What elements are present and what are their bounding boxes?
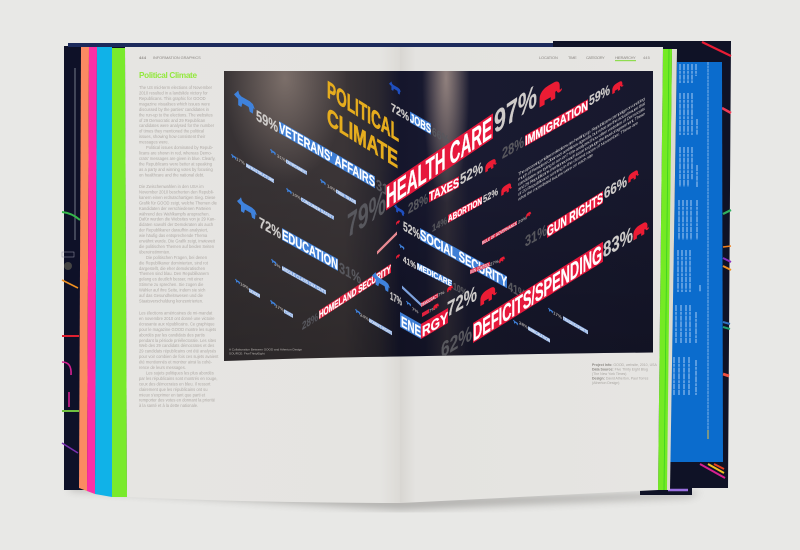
article body text: Political issues dominated by Repub- — [146, 145, 214, 150]
article body text: candidates were analysed for the number — [139, 123, 215, 128]
band: medicare: MEDICARE — [417, 261, 452, 289]
band: health care — [348, 86, 536, 236]
running header: right navigation — [539, 55, 650, 61]
icons: Democratic donkeys — [231, 80, 553, 326]
band: energy — [390, 286, 477, 339]
article body text: discussed by the parties' candidates in — [139, 107, 210, 112]
project credits — [592, 363, 657, 385]
article body text: en novembre 2010 ont donné une victoire — [139, 316, 215, 321]
article body text: Die politischen Fragen, bei denen — [146, 255, 208, 260]
Republican issues: small bands: 7% — [429, 305, 436, 315]
article body text: the run-up to the elections. The websites — [139, 112, 213, 117]
Democratic issues: small bands: 31% — [277, 153, 287, 164]
poster intro paragraph: and 29 Republicans mentioned each issue to gauge the level of agreement. These — [518, 111, 645, 193]
article body text: of 29 Democratic and 29 Republican — [139, 118, 206, 123]
icons: Republican elephants — [396, 78, 649, 310]
band: jobs: JOBS — [410, 110, 431, 136]
band: social security: SOCIAL SECURITY — [420, 227, 507, 291]
band: energy: 17% — [390, 289, 402, 309]
article body text: The US mid-term elections of November — [139, 85, 213, 90]
poster intro paragraph: what the most-listed issues were on each site — [518, 152, 593, 203]
band: education — [259, 214, 361, 288]
article body text: issues, showing how consistent their — [139, 134, 206, 139]
Democratic issues: small bands: ETHICS — [284, 309, 293, 320]
blue back page with vertical text — [670, 62, 723, 462]
Democratic issues: small bands: ENVIRONMENT — [286, 159, 307, 177]
band: abortion: 52% — [483, 186, 498, 206]
article body text: erwähnt wurde. Die Grafik zeigt, inwieweit — [139, 238, 216, 244]
article body text: the Republicans were better at speaking — [139, 161, 213, 166]
Democratic issues: large bands — [256, 100, 526, 303]
Democratic issues: small bands: GENDER — [249, 288, 260, 300]
band: immigration: 28% — [502, 133, 524, 163]
band: taxes — [408, 162, 483, 214]
band: immigration: 59% — [589, 82, 610, 110]
running header: left: INFORMATION GRAPHICS — [153, 55, 201, 60]
band: education: 72% — [259, 214, 281, 243]
poster title — [327, 80, 399, 168]
Republican issues: small bands: RULE OF GOVERNANCE — [482, 221, 517, 247]
article body text: der Republikaner daraufhin analysiert, — [139, 228, 208, 233]
article body text: Les sujets politiques les plus abordés — [146, 370, 214, 376]
article body text: wie häufig das entsprechende Thema — [139, 233, 208, 238]
band: abortion: ABORTION — [448, 196, 482, 225]
band: energy: 72% — [447, 280, 477, 322]
band: taxes: TAXES — [429, 174, 459, 204]
band: education: EDUCATION — [282, 227, 338, 274]
article body text: Themen sind blau. Den Republikanern — [139, 271, 210, 276]
band: gun rights: GUN RIGHTS — [547, 190, 603, 241]
article body text: während des Wahlkampfs ansprachen. — [139, 211, 210, 216]
band: medicare: 41% — [403, 255, 416, 272]
project credits: Project Info: GOOD, website, 2010, USA — [592, 363, 657, 367]
band: deficits/spending — [441, 221, 633, 363]
left page — [125, 47, 400, 503]
poster title: CLIMATE — [327, 102, 398, 174]
band: gun rights: 31% — [525, 221, 547, 251]
article body text: Stimme zu sprechen. Sie zogen die — [139, 282, 204, 287]
band: health care: 97% — [494, 78, 537, 141]
article body text: pendant la période préélectorale. Les sites — [139, 338, 216, 343]
band: jobs: 72% — [391, 100, 409, 124]
page edge colour tabs: right — [658, 49, 677, 490]
article body text: kanern einen erdrutschartigen Sieg. Diese — [139, 195, 216, 200]
article body text: magazine visualises which issues were — [139, 101, 211, 106]
article body text: Staatsverschuldung konzentrierten. — [139, 298, 203, 304]
band: homeland security: HOMELAND SECURITY — [319, 264, 391, 322]
page edge colour tabs: left — [79, 47, 127, 497]
band: social security — [403, 221, 524, 296]
band: homeland security: 28% — [302, 310, 318, 333]
band: energy: RGY — [422, 309, 448, 341]
heading: Political Climate: Political Climate — [139, 71, 197, 80]
running header: left: 444 — [139, 55, 147, 60]
article body text: Web des 29 candidats démocrates et des — [139, 343, 214, 348]
article body text: Kandidaten der verschiedenen Parteien — [139, 206, 212, 211]
poster credit: A Collaboration Between GOOD and Atherton Design — [229, 348, 302, 352]
article body text: Dafür wurden die Websites von je 29 Kan- — [139, 217, 216, 222]
article body text: as a party and winning votes by focusing — [139, 167, 213, 172]
band: social security: 52% — [403, 218, 420, 242]
project credits: (The New York Times) — [592, 372, 626, 376]
article body text: die Republikaner dominierten, sind rot — [139, 260, 209, 265]
running header: right navigation: 445 — [643, 55, 650, 60]
back cover: left side — [62, 43, 556, 490]
poster title: POLITICAL — [327, 75, 399, 147]
project credits: (Atherton Design) — [592, 381, 619, 385]
Democratic issues: small bands: WOMEN'S RIGHTS — [369, 318, 392, 337]
Republican issues: small bands: 27% — [490, 259, 499, 267]
running header: right navigation: TIME — [568, 55, 577, 60]
band: taxes: 28% — [408, 190, 428, 218]
poster intro paragraph: of 29 Republicans running in the closest races of November. These are — [518, 120, 638, 198]
article body text: clairement que les républicains ont su — [139, 387, 208, 392]
right page — [400, 47, 663, 503]
article body text: par les républicains sont montrés en rouge, — [139, 376, 218, 381]
article body text: écrasante aux républicains. Ce graphique — [139, 321, 215, 326]
running header: right navigation: CATEGORY — [586, 55, 605, 60]
Democratic issues: small bands: 10% — [292, 191, 302, 202]
band: jobs: 66% — [432, 124, 449, 148]
article body text: à la santé et à la dette nationale. — [139, 403, 198, 408]
article body text: crats' messages are given in blue. Clearly, — [139, 156, 216, 161]
article body text: 2010 resulted in a landslide victory for — [139, 90, 208, 96]
Republican issues: small bands: GUN CONTROL — [470, 262, 490, 276]
article body text: messages were. — [139, 140, 169, 145]
Republican issues: small bands: 7% — [438, 289, 445, 299]
band: abortion: 14% — [432, 215, 447, 235]
poster: Political Climate infographic — [224, 71, 653, 361]
Democratic issues: small bands: TRADE/EXPORTS — [563, 316, 588, 336]
project credits: Design: David Atherton, Paul Torres — [592, 376, 649, 380]
band: social security: 41% — [508, 278, 526, 303]
Democratic issues: small bands: MIDDLE CLASS TAX CUTS — [282, 266, 326, 296]
article body text: été mentionnés et montrer ainsi la cohé- — [139, 360, 213, 365]
article body text: remporter des votes en donnant la priorité — [139, 398, 216, 403]
project credits: Data Source: Five Thirty Eight Blog — [592, 368, 648, 372]
Republican issues: small bands: 7% — [412, 306, 419, 316]
article body text — [139, 85, 219, 408]
band: health care: HEALTH CARE — [386, 111, 492, 216]
poster intro paragraph: The upcoming midterm elections are heating up. Republicans campaign on undoing — [518, 96, 645, 178]
Democratic issues: small bands: 17% — [275, 303, 285, 314]
band: deficits/spending: 62% — [441, 320, 472, 363]
Democratic issues: small bands: FREE TRADE — [336, 189, 356, 206]
article body text: dargestellt, die eher demokratischen — [139, 266, 206, 271]
Republican issues: small bands: DEMOCRACY — [421, 293, 438, 309]
back cover: right side — [553, 41, 731, 495]
band: medicare — [403, 256, 467, 296]
article body text: Republicans. This graphic for GOOD — [139, 96, 206, 101]
band: medicare: 10% — [453, 281, 467, 300]
band: immigration: IMMIGRATION — [525, 97, 588, 148]
article body text: Les élections américaines de mi-mandat — [139, 310, 213, 316]
Democratic issues: small bands: 17% — [553, 310, 563, 321]
Democratic issues: small bands: 24% — [360, 312, 370, 323]
band: abortion — [432, 188, 498, 232]
article body text: Die Zwischenwahlen in den USA im — [139, 184, 204, 189]
article body text: pour le magazine GOOD montre les sujets — [139, 327, 216, 332]
running header: right navigation: LOCATION — [539, 55, 558, 60]
article body text: didaten sowohl der Demokraten als auch — [139, 222, 214, 227]
band: jobs — [391, 102, 448, 142]
book shadow — [70, 485, 700, 510]
Republican issues: small bands: 20% — [518, 215, 528, 226]
band: health care: 79% — [347, 182, 386, 245]
band: immigration — [502, 82, 610, 163]
article body text: pour voir combien de fois ces sujets avaient — [139, 354, 219, 359]
article body text: Wähler auf ihre Seite, indem sie sich — [139, 288, 206, 293]
running header: right navigation: HIERARCHY — [615, 55, 636, 60]
band: deficits/spending: DEFICITS/SPENDING — [473, 239, 602, 347]
Democratic issues: small bands: IMMIGRATION — [528, 326, 550, 344]
article body text: auf das Gesundheitswesen und die — [139, 293, 204, 298]
article body text: mieux s'exprimer en tant que parti et — [139, 392, 206, 397]
Republican issues: small bands — [377, 215, 528, 317]
article body text: übereinstimmten. — [139, 249, 170, 254]
Democratic issues: small bands: 10% — [240, 281, 250, 292]
poster credit — [229, 348, 302, 355]
article body text: die politischen Themen auf beiden Seiten — [139, 244, 215, 249]
article body text: on healthcare and the national debt. — [139, 172, 204, 177]
band: education: 31% — [339, 259, 361, 288]
band: gun rights: 66% — [604, 173, 627, 203]
band: energy: ENE — [401, 313, 421, 341]
Democratic issues: small bands: 3% — [274, 261, 281, 271]
band: veterans' affairs: 59% — [256, 107, 278, 136]
article body text: licans are shown in red, whereas Demo- — [139, 150, 213, 156]
article body text: of times they mentioned the political — [139, 129, 204, 134]
poster intro paragraph: candidates are trying to run on? We analyzed how often websites of Democrats — [518, 106, 646, 188]
Democratic issues: small bands: CONSUMER SAFETY — [301, 197, 334, 222]
article body text: abordés par les candidats des partis — [139, 332, 205, 337]
band: veterans' affairs — [256, 110, 386, 195]
Democratic issues: small bands: INFRASTRUCTURE — [246, 163, 274, 185]
article body text: gelang es deutlich besser, mit einer — [139, 277, 204, 282]
band: homeland security — [302, 264, 391, 333]
band: gun rights — [525, 176, 627, 246]
band: taxes: 52% — [460, 159, 483, 189]
Democratic issues: small bands: 14% — [327, 183, 337, 194]
poster credit: SOURCE: FiveThirtyEight — [229, 352, 265, 356]
Democratic issues: small bands: 17% — [236, 156, 246, 167]
article body text: Grafik für GOOD zeigt, welche Themen die — [139, 200, 218, 205]
article body text: ceux des démocrates en bleu. Il ressort — [139, 381, 211, 386]
poster intro paragraph: much of President Obama's ambitious agenda, but what are the actual issues that — [518, 101, 646, 183]
band: deficits/spending: 83% — [603, 221, 633, 263]
band: veterans' affairs: VETERANS' AFFAIRS — [279, 120, 375, 191]
article body text: rence de leurs messages. — [139, 365, 186, 370]
Democratic issues: small bands — [236, 153, 588, 344]
article body text: 29 candidats républicains ont été analysés — [139, 349, 216, 354]
article body text: November 2010 bescherten den Republi- — [139, 190, 215, 194]
Democratic issues: small bands: 28% — [519, 320, 529, 331]
band: veterans' affairs: 31% — [376, 176, 398, 205]
